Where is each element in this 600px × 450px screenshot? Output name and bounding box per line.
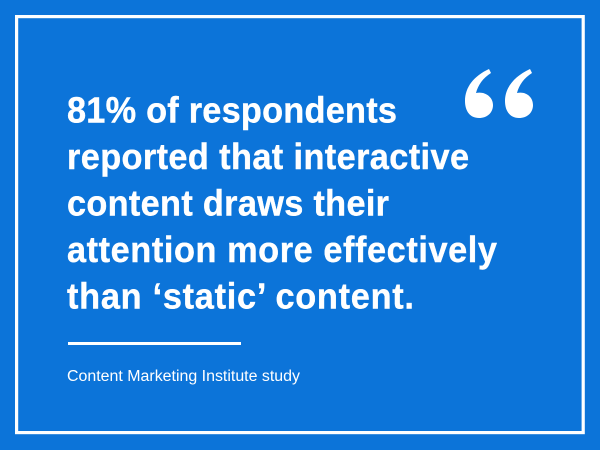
quote text: content draws their — [67, 182, 389, 224]
quote text: reported that interactive — [67, 136, 469, 177]
divider line — [68, 342, 241, 345]
source attribution: Content Marketing Institute study — [67, 368, 300, 385]
quote text: attention more effectively — [67, 229, 497, 270]
quote text — [67, 90, 497, 317]
quote text: than ‘static’ content. — [67, 275, 414, 317]
quote text: 81% of respondents — [67, 90, 397, 131]
icon: quotation marks — [465, 69, 533, 118]
